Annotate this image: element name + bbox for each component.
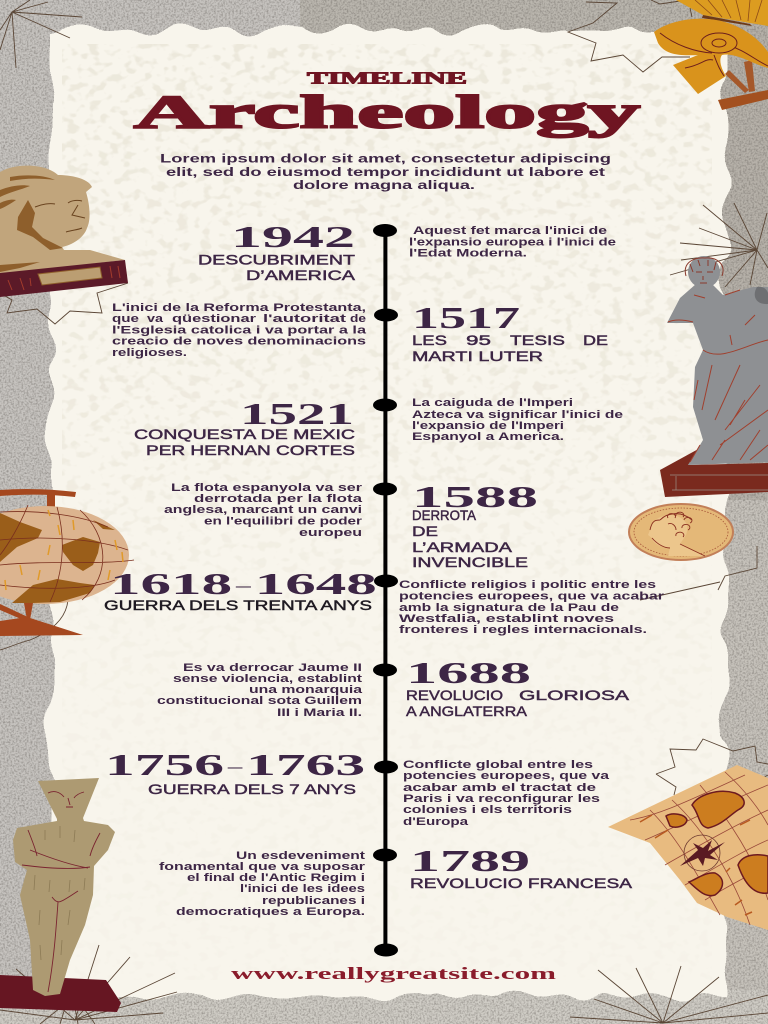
- icon: coin with portrait: [629, 504, 733, 560]
- event 1521 description: Espanyol a America.: [412, 431, 564, 443]
- event 1588 description: [164, 482, 363, 539]
- event 1756-1763 description: d'Europa: [403, 816, 469, 828]
- event 1942 description: [409, 225, 616, 260]
- event 1942 heading: [198, 219, 356, 283]
- event 1517 heading: TESIS: [510, 333, 565, 348]
- decoration: thin curve right: [640, 546, 757, 600]
- event 1618-1648 heading: GUERRA DELS TRENTA ANYS: [104, 598, 372, 613]
- event 1618-1648 description: [399, 579, 665, 636]
- decoration: burst behind statue: [670, 203, 768, 287]
- decoration: burst behind figure: [0, 945, 177, 1024]
- icon: idol figure on base: [0, 778, 121, 1012]
- intro text: Lorem ipsum dolor sit amet, consectetur adipiscing: [160, 152, 611, 166]
- icon: bust on pedestal: [0, 166, 128, 324]
- event 1588 heading: DE: [412, 524, 438, 539]
- decoration: burst top left: [0, 0, 82, 68]
- event 1618-1648 description: Westfalia, establint noves: [399, 613, 614, 625]
- event 1588 description: derrotada per la flota: [194, 493, 363, 505]
- intro text: [160, 152, 611, 192]
- event 1618-1648 description: potencies europees, que va acabar: [399, 590, 665, 602]
- event 1688 description: sense violencia, establint: [173, 673, 363, 685]
- event 1517 description: qüestionar: [172, 313, 257, 325]
- event 1521 heading: PER HERNAN CORTES: [146, 443, 355, 458]
- icon: treasure map: [608, 765, 768, 930]
- event 1756-1763 heading: GUERRA DELS 7 ANYS: [148, 782, 356, 797]
- event 1618-1648 heading: 1648: [255, 567, 377, 601]
- event 1756-1763 description: colonies i els territoris: [403, 804, 572, 816]
- event 1942 description: Aquest fet marca l'inici de: [413, 225, 607, 237]
- event 1517 heading: DE: [583, 333, 608, 348]
- event 1588 description: en l'equilibri de poder: [204, 516, 363, 528]
- event 1688 description: una monarquia: [249, 684, 363, 696]
- event 1688 description: Es va derrocar Jaume II: [183, 662, 362, 674]
- event 1618-1648 description: Conflicte religios i politic entre les: [399, 579, 656, 591]
- event 1942 description: l'expansio europea i l'inici de: [409, 236, 616, 248]
- event 1521 description: l'expansio de l'Imperi: [412, 420, 564, 432]
- icon: venus statue: [660, 256, 768, 497]
- timeline axis with dots: [373, 224, 398, 956]
- event 1588 description: europeu: [299, 527, 362, 539]
- event 1588 heading: L’ARMADA: [412, 540, 513, 555]
- event 1789 description: l'inici de les idees: [240, 883, 365, 895]
- event 1756-1763 heading: 1756: [105, 748, 224, 782]
- event 1688 description: [157, 662, 363, 719]
- paper blotch texture: [62, 44, 712, 564]
- event 1688 heading: GLORIOSA: [519, 688, 630, 703]
- event 1618-1648 description: fronteres i regles internacionals.: [399, 624, 647, 636]
- decoration: burst bottom right: [570, 966, 768, 1023]
- event 1688 description: III i Maria II.: [277, 707, 362, 719]
- decoration: star outline top right: [568, 0, 692, 72]
- event 1521 heading: [134, 396, 355, 458]
- event 1789 heading: [410, 843, 633, 891]
- event 1517 heading: 1517: [412, 300, 520, 335]
- title: TIMELINE: TIMELINE: [307, 68, 467, 88]
- event 1789 description: republicanes i: [262, 895, 365, 907]
- event 1756-1763 heading: –: [227, 758, 243, 775]
- event 1618-1648 heading: –: [235, 578, 251, 594]
- event 1588 heading: [412, 479, 538, 570]
- event 1517 description: va: [147, 313, 164, 325]
- event 1942 heading: 1942: [231, 219, 355, 254]
- event 1688 description: constitucional sota Guillem: [157, 695, 362, 707]
- event 1688 heading: [406, 655, 630, 719]
- event 1756-1763 description: Conflicte global entre les: [403, 759, 593, 771]
- event 1588 heading: INVENCIBLE: [412, 555, 528, 570]
- event 1521 heading: CONQUESTA DE MEXIC: [134, 427, 355, 442]
- event 1521 description: La caiguda de l'Imperi: [412, 397, 573, 409]
- event 1756-1763 description: Paris i va reconfigurar les: [403, 793, 600, 805]
- event 1618-1648 heading: [104, 567, 377, 613]
- event 1789 heading: 1789: [410, 843, 530, 878]
- event 1517 description: l'Esglesia catolica i va portar a la: [112, 324, 367, 336]
- icon: globe: [0, 489, 134, 650]
- event 1517 heading: 95: [466, 333, 492, 348]
- event 1789 description: fonamental que va suposar: [159, 861, 366, 873]
- intro text: dolore magna aliqua.: [293, 178, 475, 192]
- event 1517 description: L'inici de la Reforma Protestanta,: [112, 302, 366, 314]
- event 1521 heading: 1521: [240, 396, 354, 431]
- event 1789 description: Un esdeveniment: [236, 850, 366, 862]
- event 1517 description: [112, 302, 367, 359]
- event 1756-1763 description: potencies europees, que va: [403, 770, 610, 782]
- title: Archeology: Archeology: [134, 86, 641, 138]
- event 1517 description: religioses.: [112, 347, 187, 359]
- event 1517 description: creacio de noves denominacions: [112, 336, 366, 348]
- event 1688 heading: REVOLUCIO: [406, 688, 503, 703]
- event 1517 heading: LES: [412, 333, 447, 348]
- event 1618-1648 heading: 1618: [110, 567, 232, 601]
- event 1942 description: l'Edat Moderna.: [409, 248, 527, 260]
- event 1588 heading: DERROTA: [412, 508, 477, 523]
- event 1756-1763 description: [403, 759, 610, 828]
- event 1517 heading: [412, 300, 608, 364]
- event 1789 description: [159, 850, 366, 918]
- event 1789 description: el final de l'Antic Regim i: [187, 872, 365, 884]
- event 1688 heading: A ANGLATERRA: [406, 704, 528, 719]
- event 1588 description: anglesa, marcant un canvi: [164, 504, 362, 516]
- intro text: elit, sed do eiusmod tempor incididunt ut labore et: [166, 165, 605, 179]
- event 1517 description: que: [112, 313, 139, 325]
- event 1517 description: l'autoritat: [263, 313, 347, 325]
- icon: roman helmet on stand: [654, 0, 768, 110]
- event 1517 heading: MARTI LUTER: [412, 349, 543, 364]
- event 1618-1648 description: amb la signatura de la Pau de: [399, 602, 619, 614]
- event 1789 heading: REVOLUCIO FRANCESA: [410, 876, 633, 891]
- event 1588 description: La flota espanyola va ser: [171, 482, 363, 494]
- website footer: www.reallygreatsite.com: [231, 964, 556, 983]
- event 1517 description: de: [350, 313, 366, 325]
- event 1756-1763 heading: [105, 748, 365, 797]
- decoration: star above map: [656, 739, 768, 795]
- event 1789 description: democratiques a Europa.: [176, 906, 365, 918]
- event 1942 heading: D’AMERICA: [246, 268, 356, 283]
- event 1756-1763 description: acabar amb el tractat de: [403, 782, 596, 794]
- event 1521 description: Azteca va significar l'inici de: [412, 409, 623, 421]
- event 1756-1763 heading: 1763: [246, 748, 365, 782]
- event 1688 heading: 1688: [406, 655, 531, 690]
- event 1521 description: [412, 397, 623, 443]
- event 1588 heading: 1588: [412, 479, 538, 514]
- event 1942 heading: DESCUBRIMENT: [198, 252, 356, 268]
